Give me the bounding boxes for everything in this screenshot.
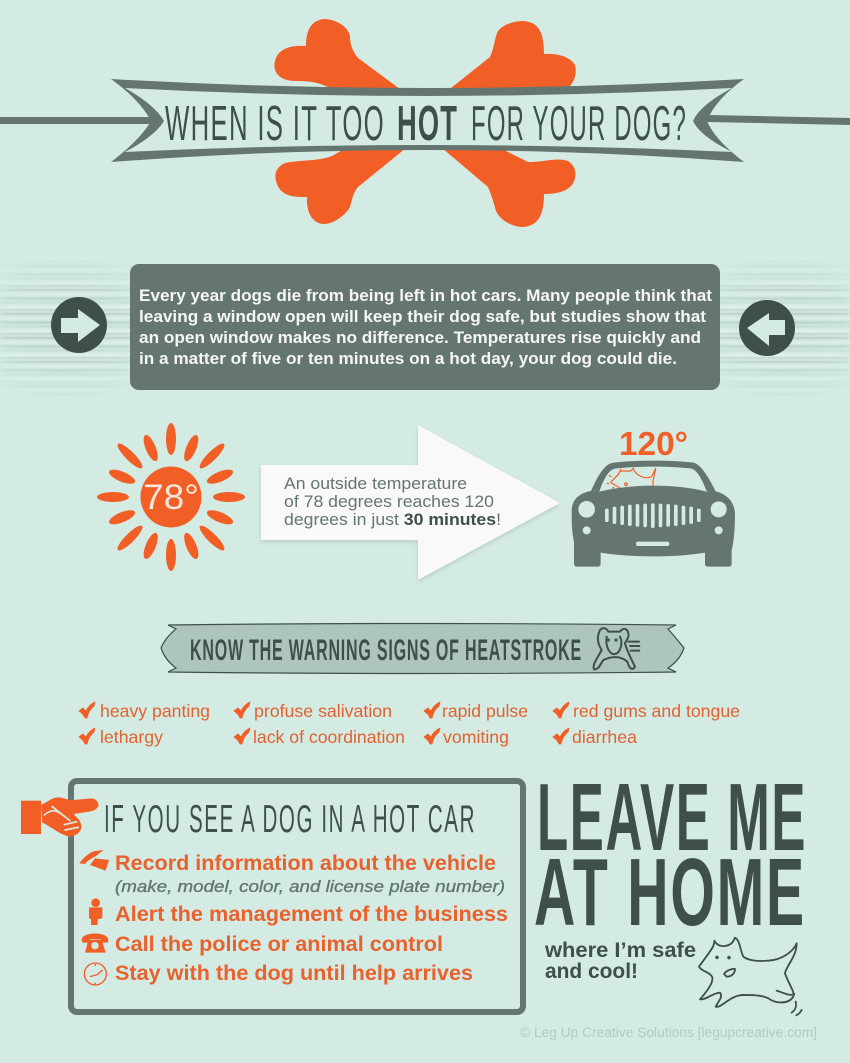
tagline: and cool! <box>545 960 638 983</box>
icon: pencil writing <box>79 850 109 871</box>
panel: if you see a dog in a hot car <box>71 781 523 1012</box>
icon: clock <box>84 963 106 985</box>
big white arrow: An outside temperature <box>284 474 467 493</box>
action note: (make, model, color, and license plate number) <box>115 877 505 896</box>
title: WHEN IS IT TOO <box>165 97 385 151</box>
panel heading: IF YOU SEE A DOG IN A HOT CAR <box>104 798 476 841</box>
sign labels: diarrhea <box>572 727 637 747</box>
icon: telephone <box>82 933 108 953</box>
action items: Stay with the dog until help arrives <box>115 961 473 985</box>
intro panel: leaving a window open will keep their dog safe, but studies show that <box>139 307 706 326</box>
title banner lines <box>0 115 850 125</box>
icon: person <box>89 898 102 925</box>
sign labels: vomiting <box>443 727 509 747</box>
sign labels: lethargy <box>100 727 163 747</box>
icon: running dog <box>594 628 639 669</box>
title banner <box>111 79 744 162</box>
big white arrow <box>261 425 560 582</box>
motion streaks <box>0 266 850 386</box>
action items: Alert the management of the business <box>115 902 508 926</box>
leave me at home headline <box>534 764 807 946</box>
intro panel <box>130 264 720 390</box>
warning signs list <box>79 701 740 747</box>
sign labels: heavy panting <box>100 701 210 721</box>
big white arrow: of 78 degrees reaches 120 <box>284 492 494 511</box>
icon: right arrow circle <box>51 297 107 353</box>
tagline <box>544 939 696 983</box>
sign labels: red gums and tongue <box>573 701 740 721</box>
title: HOT <box>397 97 458 151</box>
action items: Call the police or animal control <box>115 932 443 956</box>
copyright: © Leg Up Creative Solutions [legupcreative.com] <box>520 1025 817 1040</box>
action items <box>115 851 508 985</box>
warning signs ribbon <box>161 624 684 674</box>
car with dog <box>572 461 735 567</box>
crossed bones <box>274 19 576 227</box>
sign labels: profuse salivation <box>254 701 392 721</box>
action items: Record information about the vehicle <box>115 851 496 875</box>
icon: happy dog <box>699 938 802 1015</box>
dog in car window <box>607 468 656 490</box>
sun with 78 degrees <box>97 423 245 571</box>
big white arrow: degrees in just 30 minutes! <box>284 510 501 529</box>
icon: pointing hand <box>21 797 98 836</box>
120 degrees label: 120° <box>619 425 688 462</box>
intro panel: Every year dogs die from being left in hot cars. Many people think that <box>139 286 712 305</box>
intro panel: an open window makes no difference. Temperatures rise quickly and <box>139 328 701 347</box>
tagline: where I’m safe <box>544 939 696 962</box>
check marks <box>79 702 569 744</box>
icon: left arrow circle <box>739 300 795 356</box>
intro panel: in a matter of five or ten minutes on a hot day, your dog could die. <box>139 349 677 368</box>
sign labels <box>100 701 740 747</box>
sign labels: rapid pulse <box>442 701 528 721</box>
sign labels: lack of coordination <box>253 727 405 747</box>
sun with 78 degrees: 78° <box>143 478 199 517</box>
